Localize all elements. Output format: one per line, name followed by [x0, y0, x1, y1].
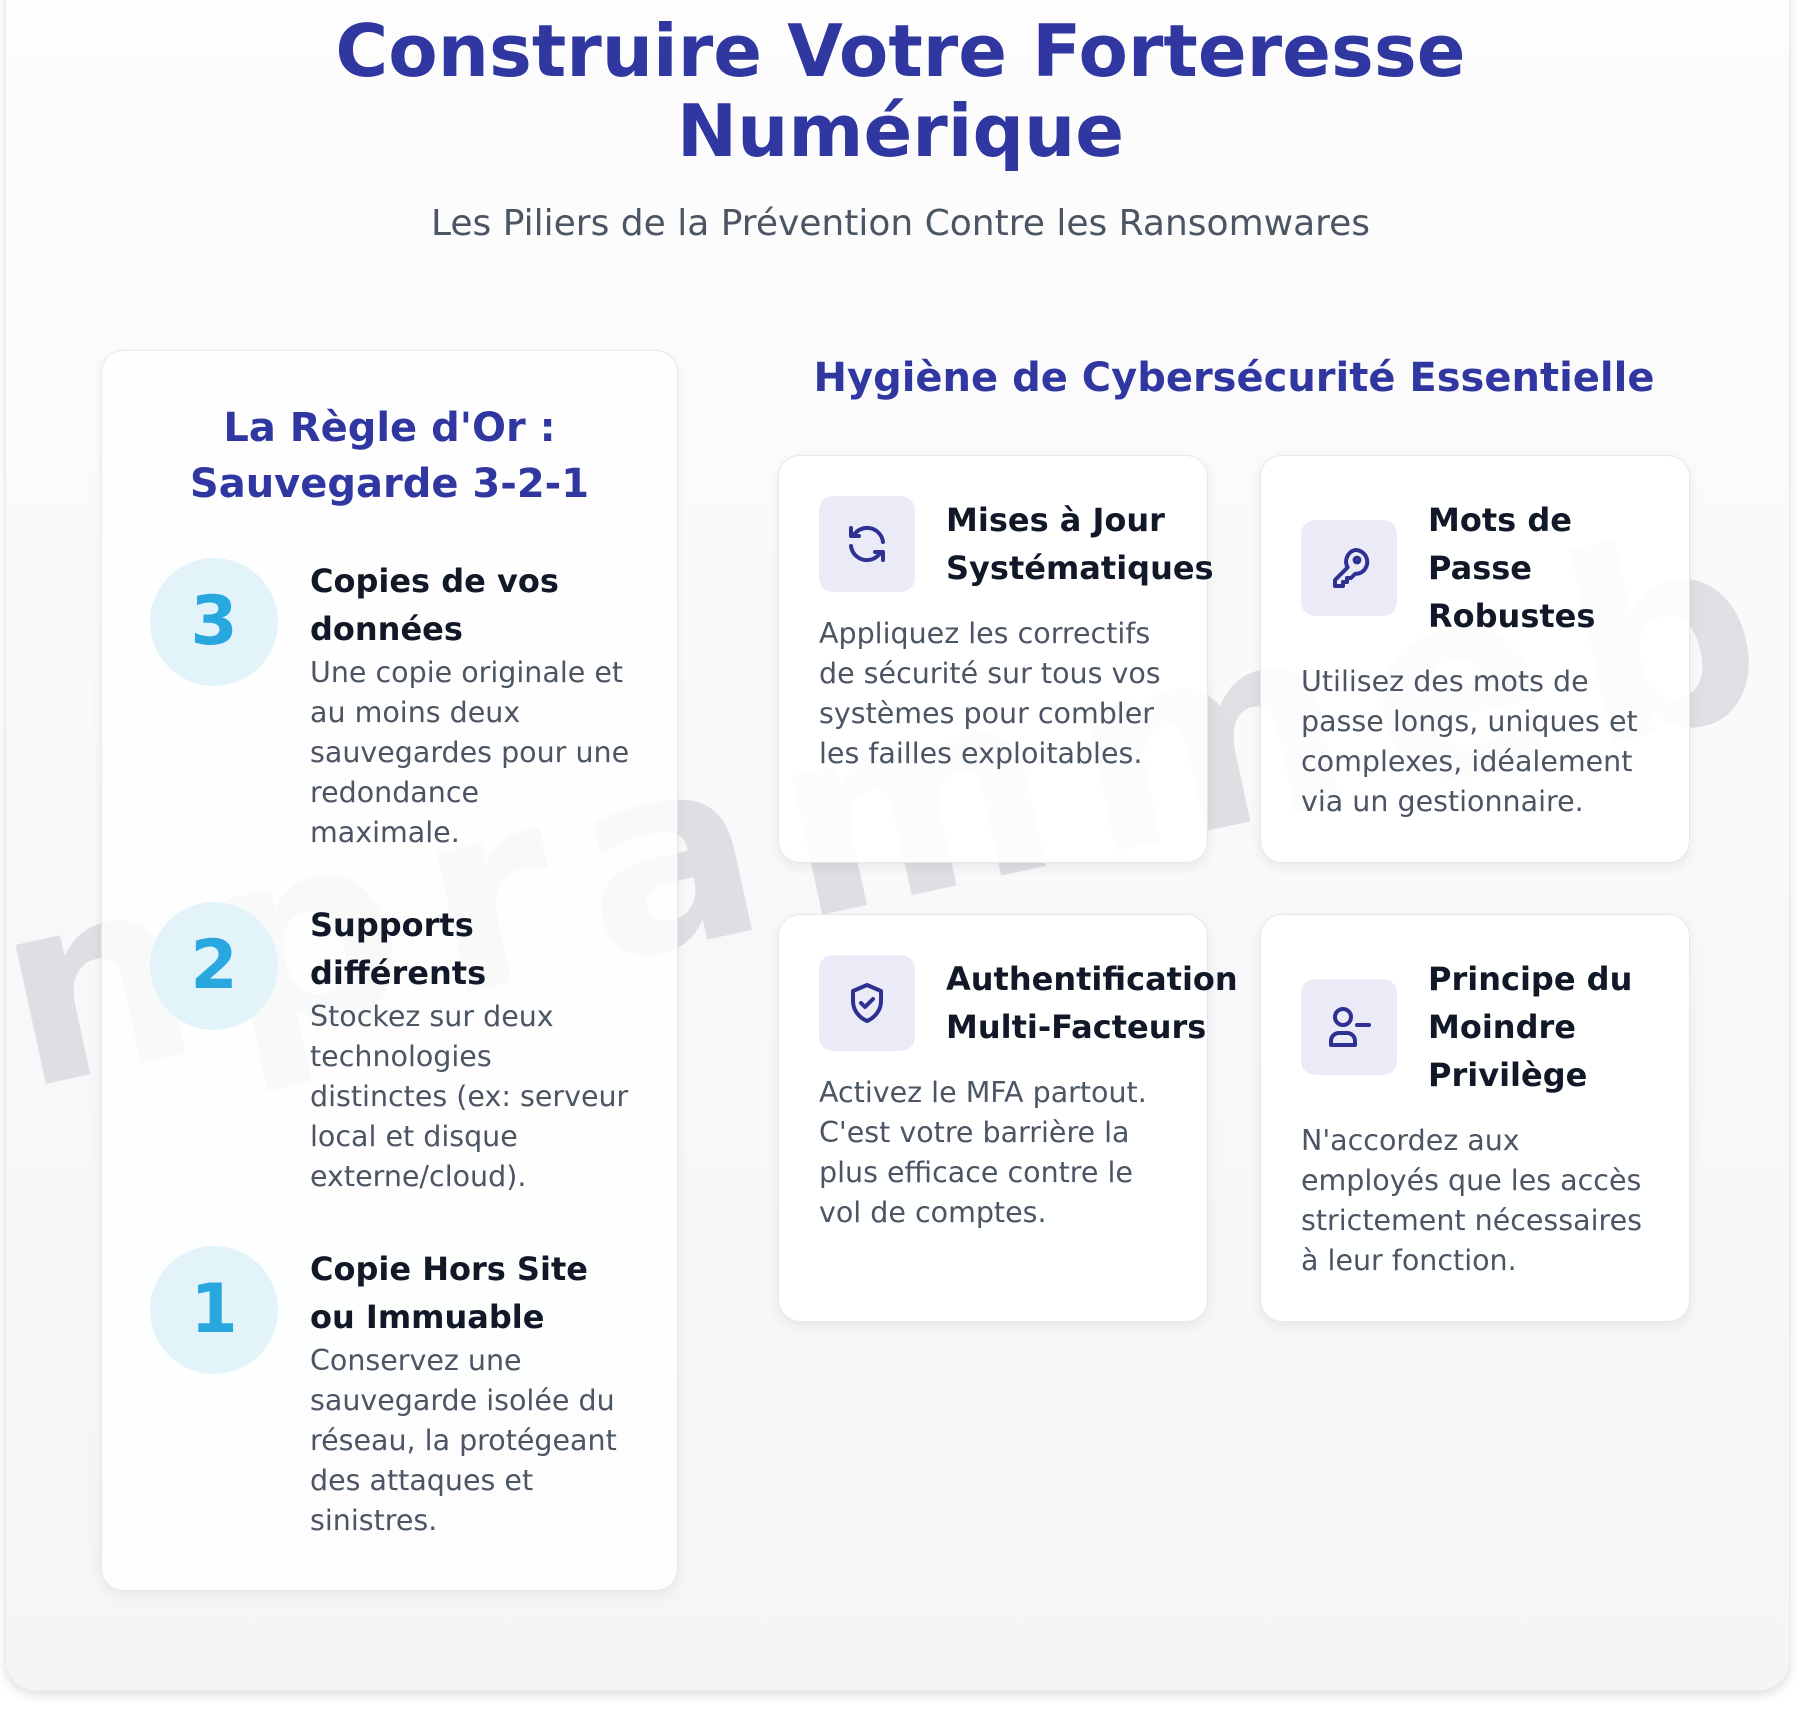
text: différents — [310, 954, 486, 992]
title: Construire Votre Forteresse — [335, 9, 1466, 93]
panel: 3-2-1 backup rule — [101, 350, 678, 1591]
right heading: Hygiène de Cybersécurité Essentielle — [814, 355, 1654, 401]
text: Conservez une sauvegarde isolée du réseau, la protégeant des attaques et sinistres. — [310, 1344, 617, 1537]
card: updates: Systématiques — [946, 549, 1214, 587]
watermark: nprammeb — [0, 466, 1801, 1149]
icon: number 3 — [150, 558, 278, 686]
card: passwords: Robustes — [1428, 597, 1595, 635]
icon: key — [1301, 520, 1397, 616]
left heading — [190, 405, 589, 507]
card: MFA — [778, 914, 1208, 1322]
text: Sauvegarde 3-2-1 — [190, 461, 589, 507]
text: données — [310, 610, 463, 648]
text: Une copie originale et au moins deux sauvegardes pour une redondance maximale. — [310, 656, 629, 849]
card: updates: Appliquez les correctifs de sécurité sur tous vos systèmes pour combler les failles exploitables. — [819, 617, 1161, 770]
icon: number 1: 1 — [190, 1270, 238, 1349]
text: Stockez sur deux technologies distinctes (ex: serveur local et disque externe/cloud). — [310, 1000, 628, 1193]
card: passwords — [1260, 455, 1690, 863]
card: least privilege: Privilège — [1428, 1056, 1587, 1094]
icon: number 3: 3 — [190, 582, 238, 661]
item: 3 copies — [150, 558, 629, 849]
card: passwords: Utilisez des mots de passe longs, uniques et complexes, idéalement via un gestionnaire. — [1301, 665, 1638, 818]
text: Copie Hors Site — [310, 1250, 588, 1288]
item: 2 supports — [150, 902, 628, 1193]
text: La Règle d'Or : — [223, 405, 556, 451]
title: Numérique — [677, 89, 1124, 173]
subtitle: Les Piliers de la Prévention Contre les Ransomwares — [431, 203, 1370, 244]
icon: number 2 — [150, 902, 278, 1030]
icon: number 1 — [150, 1246, 278, 1374]
card: MFA: Activez le MFA partout. C'est votre barrière la plus efficace contre le vol de comptes. — [819, 1076, 1147, 1229]
card: passwords: Passe — [1428, 549, 1532, 587]
icon: shield check — [819, 955, 915, 1051]
title — [335, 9, 1466, 173]
card: least privilege: Moindre — [1428, 1008, 1576, 1046]
icon: user minus — [1301, 979, 1397, 1075]
card: updates — [778, 455, 1208, 863]
text: Supports — [310, 906, 474, 944]
card: least privilege: Principe du — [1428, 960, 1632, 998]
icon: refresh — [819, 496, 915, 592]
icon: number 2: 2 — [190, 926, 238, 1005]
card: least privilege — [1260, 914, 1690, 1322]
card: MFA: Authentification — [946, 960, 1238, 998]
text: Copies de vos — [310, 562, 559, 600]
item: 1 offsite — [150, 1246, 617, 1537]
text: ou Immuable — [310, 1298, 544, 1336]
card: least privilege: N'accordez aux employés que les accès strictement nécessaires à leur fonction. — [1301, 1124, 1642, 1277]
card: MFA: Multi-Facteurs — [946, 1008, 1206, 1046]
card: updates: Mises à Jour — [946, 501, 1165, 539]
card: passwords: Mots de — [1428, 501, 1572, 539]
